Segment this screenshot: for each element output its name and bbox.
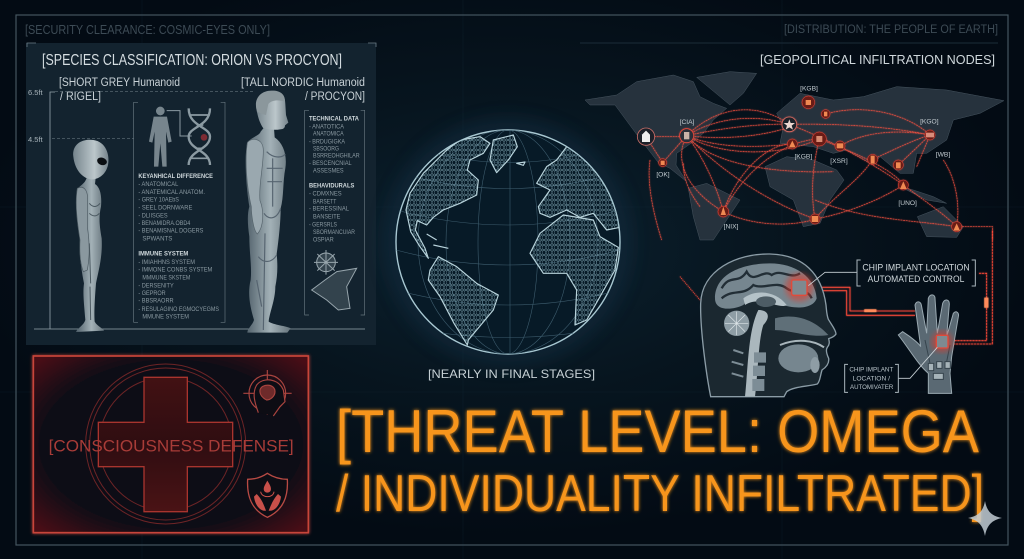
node: CIA bbox=[680, 129, 694, 143]
map labels: [KGO] bbox=[920, 119, 939, 126]
list: technical data bbox=[309, 117, 360, 175]
circuit lines bbox=[680, 230, 992, 344]
icon: sparkle bbox=[968, 501, 1002, 536]
icon: dna helix bbox=[167, 108, 210, 165]
icon: shield with hands bbox=[248, 473, 287, 517]
list: key anatomical difference bbox=[138, 174, 213, 243]
list: key anatomical difference: KEYANHICAL DIFFERENCE bbox=[138, 174, 213, 180]
label: short grey humanoid: / RIGEL] bbox=[60, 91, 101, 103]
node: white west coast bbox=[637, 128, 655, 145]
panel: consciousness defense bbox=[33, 356, 308, 533]
map heading: [GEOPOLITICAL INFILTRATION NODES] bbox=[760, 52, 995, 67]
list: key anatomical difference: - ANATOMICAL bbox=[138, 182, 179, 188]
list: key anatomical difference: - ANATEMICAL ANATOM. bbox=[138, 190, 205, 196]
head cross-section bbox=[701, 254, 836, 397]
human figure bbox=[246, 91, 291, 333]
list: technical data: ANATOMICA bbox=[313, 132, 344, 138]
header: distribution: [DISTRIBUTION: THE PEOPLE OF EARTH] bbox=[784, 24, 998, 36]
middle data box bbox=[134, 102, 225, 322]
chip: hand bbox=[931, 331, 953, 352]
list: technical data: ASSESMES bbox=[313, 169, 344, 175]
icon: virus bbox=[314, 250, 338, 275]
list: key anatomical difference: - BENAMISNAL DOGERS bbox=[138, 229, 203, 235]
label: short grey humanoid bbox=[59, 77, 180, 103]
list: technical data: - ANATOTICA bbox=[309, 125, 344, 131]
callout: hand chip bbox=[845, 347, 937, 392]
icon: human silhouette bbox=[149, 107, 172, 167]
right data box bbox=[305, 110, 365, 315]
world map bbox=[585, 72, 1004, 240]
list: behaviourals: OSPIAR bbox=[313, 238, 334, 244]
callout: hand chip: AUTOMIVATER bbox=[850, 384, 894, 391]
map labels: [UNO] bbox=[898, 200, 917, 207]
list: immune system: - IMMONE CONBS SYSTEM bbox=[138, 268, 212, 274]
callout: brain chip: CHIP IMPLANT LOCATION bbox=[862, 263, 970, 273]
header: security clearance: [SECURITY CLEARANCE: COSMIC-EYES ONLY] bbox=[25, 23, 270, 37]
list: behaviourals: BEHAVIDURALS bbox=[309, 183, 354, 189]
list: behaviourals: - BERESSINAL bbox=[309, 207, 350, 213]
species heading: [SPECIES CLASSIFICATION: ORION VS PROCYON] bbox=[42, 52, 342, 69]
label: short grey humanoid: [SHORT GREY Humanoid bbox=[59, 77, 180, 89]
list: key anatomical difference: - DLIISGES bbox=[138, 213, 168, 219]
globe caption: [NEARLY IN FINAL STAGES] bbox=[428, 367, 595, 381]
map labels: [KGB] bbox=[800, 86, 818, 93]
callout: brain chip bbox=[808, 260, 975, 286]
map labels: [OK] bbox=[656, 172, 670, 179]
list: key anatomical difference: - BENAMIDRA.OBD4 bbox=[138, 221, 191, 227]
list: technical data: - BESCENCNIAL bbox=[309, 161, 352, 167]
list: immune system: MMMUNE SKSTEM bbox=[142, 276, 190, 282]
map labels: [KGB] bbox=[794, 153, 812, 160]
list: immune system: - BBSRAORR bbox=[138, 299, 174, 305]
brain and hand implant diagram bbox=[680, 230, 992, 397]
list: key anatomical difference: - SEEL DORNWARE bbox=[138, 205, 192, 211]
map labels bbox=[656, 86, 950, 231]
map connection arcs bbox=[646, 110, 993, 240]
callout: brain chip: AUTOMATED CONTROL bbox=[868, 274, 964, 284]
panel: species classification bbox=[26, 43, 376, 345]
list: behaviourals: - GERSRLS bbox=[309, 223, 337, 229]
defense label: [CONSCIOUSNESS DEFENSE] bbox=[49, 437, 294, 456]
list: behaviourals: BARSETT bbox=[313, 199, 337, 205]
list: key anatomical difference: - GREY 10AEbS bbox=[138, 198, 179, 204]
list: immune system: - DERSENITY bbox=[138, 283, 174, 289]
main title bbox=[336, 398, 984, 523]
globe bbox=[383, 117, 633, 381]
list: behaviourals bbox=[309, 183, 356, 244]
list: immune system: IMMUNE SYSTEM bbox=[138, 252, 188, 258]
height scale: 6.5ft bbox=[28, 88, 44, 97]
list: immune system: - GEPROR bbox=[138, 291, 166, 297]
defense rings bbox=[86, 364, 246, 524]
node: star bbox=[782, 117, 797, 132]
alien figure bbox=[73, 140, 108, 332]
callout: hand chip: CHIP IMPLANT bbox=[849, 367, 893, 374]
globe graticule bbox=[396, 130, 620, 354]
list: immune system bbox=[138, 252, 219, 320]
icon: cell bbox=[312, 268, 357, 310]
list: immune system: MMUNE SYSTEM bbox=[142, 314, 189, 320]
label: tall nordic humanoid bbox=[241, 77, 365, 103]
list: technical data: - BRDUGIGKA bbox=[309, 139, 345, 145]
list: behaviourals: SBORMANCUIAR bbox=[313, 230, 356, 236]
map nodes bbox=[637, 96, 962, 232]
map labels: [NIX] bbox=[724, 224, 739, 231]
list: technical data: SBSOORG bbox=[313, 147, 339, 153]
callout: hand chip: LOCATION / bbox=[853, 375, 890, 382]
label: tall nordic humanoid: / PROCYON] bbox=[305, 91, 365, 103]
list: immune system: - IMIAHHNS SYSTEM bbox=[138, 260, 195, 266]
list: immune system: - RESULAGINO EGMOCYEGMS bbox=[138, 307, 219, 313]
map labels: [WB] bbox=[936, 151, 950, 158]
list: behaviourals: BANSEITE bbox=[313, 214, 340, 220]
height scale: 4.5ft bbox=[28, 135, 44, 144]
height scale bbox=[28, 88, 365, 329]
label: tall nordic humanoid: [TALL NORDIC Humanoid bbox=[241, 77, 365, 89]
list: behaviourals: - CDMXNES bbox=[309, 191, 342, 197]
map labels: [CIA] bbox=[680, 119, 695, 126]
icon: brain target bbox=[243, 370, 292, 416]
globe continents bbox=[406, 135, 623, 345]
hand bbox=[898, 295, 959, 393]
map labels: [XSR] bbox=[830, 158, 848, 165]
list: technical data: BSRREOHGHILAR bbox=[313, 154, 360, 160]
list: key anatomical difference: SPWANTS bbox=[142, 237, 172, 243]
map land masses bbox=[585, 72, 1004, 240]
list: technical data: TECHNICAL DATA bbox=[309, 117, 360, 123]
red cross bbox=[98, 377, 233, 512]
chip: brain bbox=[785, 273, 813, 301]
